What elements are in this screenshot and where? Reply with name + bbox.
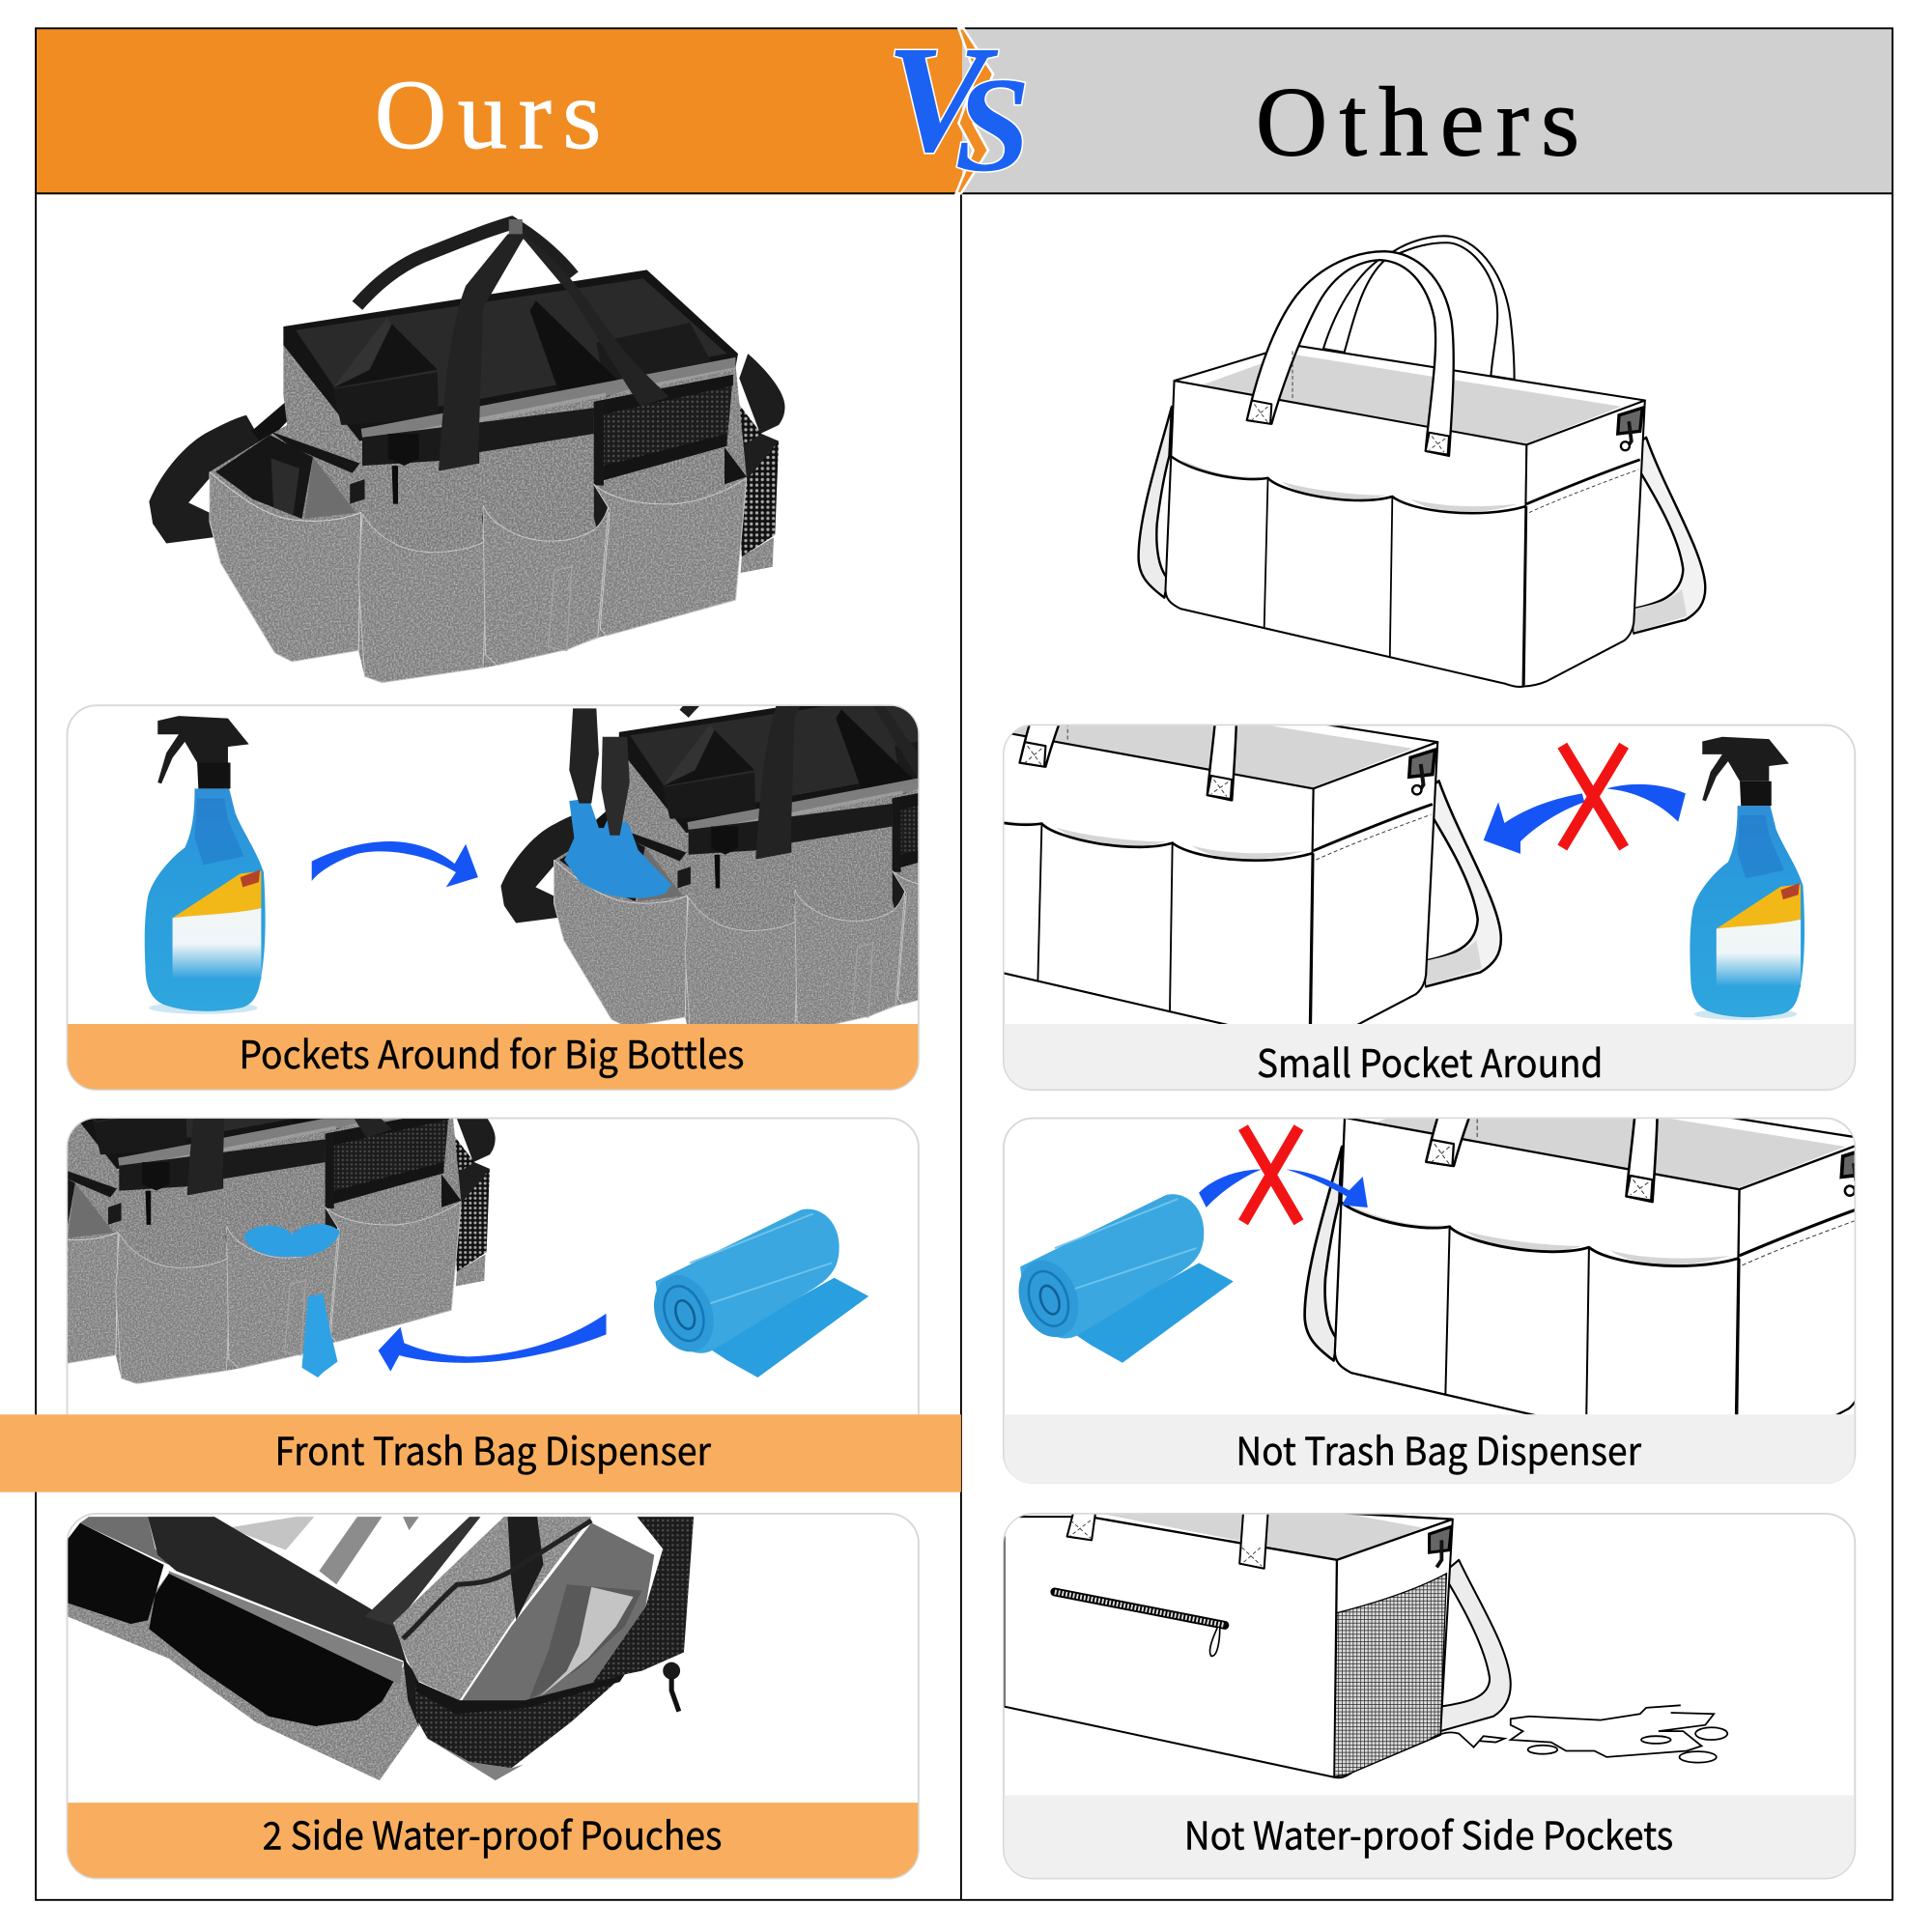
- panel: not trash bag dispenser: [1003, 1117, 1857, 1484]
- panel: front trash bag dispenser: [66, 1117, 920, 1414]
- caption: not water-proof: Not Water-proof Side Pockets: [1184, 1806, 1673, 1861]
- bag interior: [1097, 1513, 1423, 1560]
- caption: small pocket: Small Pocket Around: [1257, 1034, 1603, 1089]
- panel: pockets around for big bottles: [66, 704, 920, 1092]
- panel: side water-proof pouches: [68, 1514, 919, 1879]
- VS badge: S: [955, 50, 1031, 200]
- band: caption background: [1005, 1795, 1855, 1878]
- icon: red cross: [1243, 1127, 1298, 1222]
- caption: front trash bag: Front Trash Bag Dispenser: [274, 1422, 712, 1477]
- arrow: bottle into pocket: [312, 841, 478, 887]
- VS badge: [886, 15, 1031, 200]
- bag faces: [1005, 1517, 1453, 1777]
- caption: water-proof pouches: 2 Side Water-proof Pouches: [263, 1806, 722, 1861]
- arrow: blocked roll: [1199, 1169, 1368, 1208]
- strap: [1440, 1560, 1511, 1731]
- icon: spray bottle: [1690, 737, 1804, 1020]
- arrow: roll to dispenser: [379, 1314, 607, 1372]
- band: caption background: [68, 1803, 918, 1878]
- photo: bag with trash rolls: [0, 972, 496, 1383]
- mesh side pocket: [1334, 1574, 1446, 1776]
- drawing: bag close up: [1005, 725, 1503, 1024]
- band: caption background: [1005, 1024, 1855, 1090]
- handle patches: [1067, 1513, 1267, 1569]
- line drawing: other bag: [1139, 236, 1705, 687]
- panel: not water-proof side pockets: [1004, 1513, 1855, 1879]
- caption: not trash bag: Not Trash Bag Dispenser: [1236, 1422, 1642, 1477]
- icon: trash bag roll: [1009, 1194, 1234, 1363]
- header: Others gray band: [962, 28, 1892, 193]
- drawing: bag close up: [1303, 1119, 1855, 1414]
- band: caption background: [1005, 1414, 1855, 1484]
- zipper: [1055, 1592, 1225, 1625]
- product photo: our bag: [149, 219, 784, 683]
- heading: Ours: Ours: [375, 60, 601, 170]
- water puddle: [1431, 1705, 1727, 1763]
- strap clip: [1430, 1526, 1452, 1552]
- heading: Others: Others: [1256, 68, 1579, 178]
- photo: open pouches: [68, 1517, 694, 1780]
- band: caption background: [68, 1024, 918, 1090]
- panel: small pocket around: [1003, 724, 1857, 1092]
- header: Ours orange band: [36, 28, 962, 193]
- drawing: bag with mesh pocket and puddle: [1005, 1513, 1727, 1777]
- icon: spray bottle: [145, 716, 266, 1014]
- band: front trash bag caption background: [0, 1414, 961, 1492]
- photo: bag with bottles: [500, 638, 1061, 1045]
- icon: red cross: [1562, 746, 1624, 848]
- arrow: blocked bottle: [1484, 784, 1686, 854]
- VS badge: V: [886, 15, 999, 185]
- icon: trash bag roll: [643, 1209, 868, 1378]
- caption: pockets around: Pockets Around for Big Bottles: [239, 1025, 744, 1080]
